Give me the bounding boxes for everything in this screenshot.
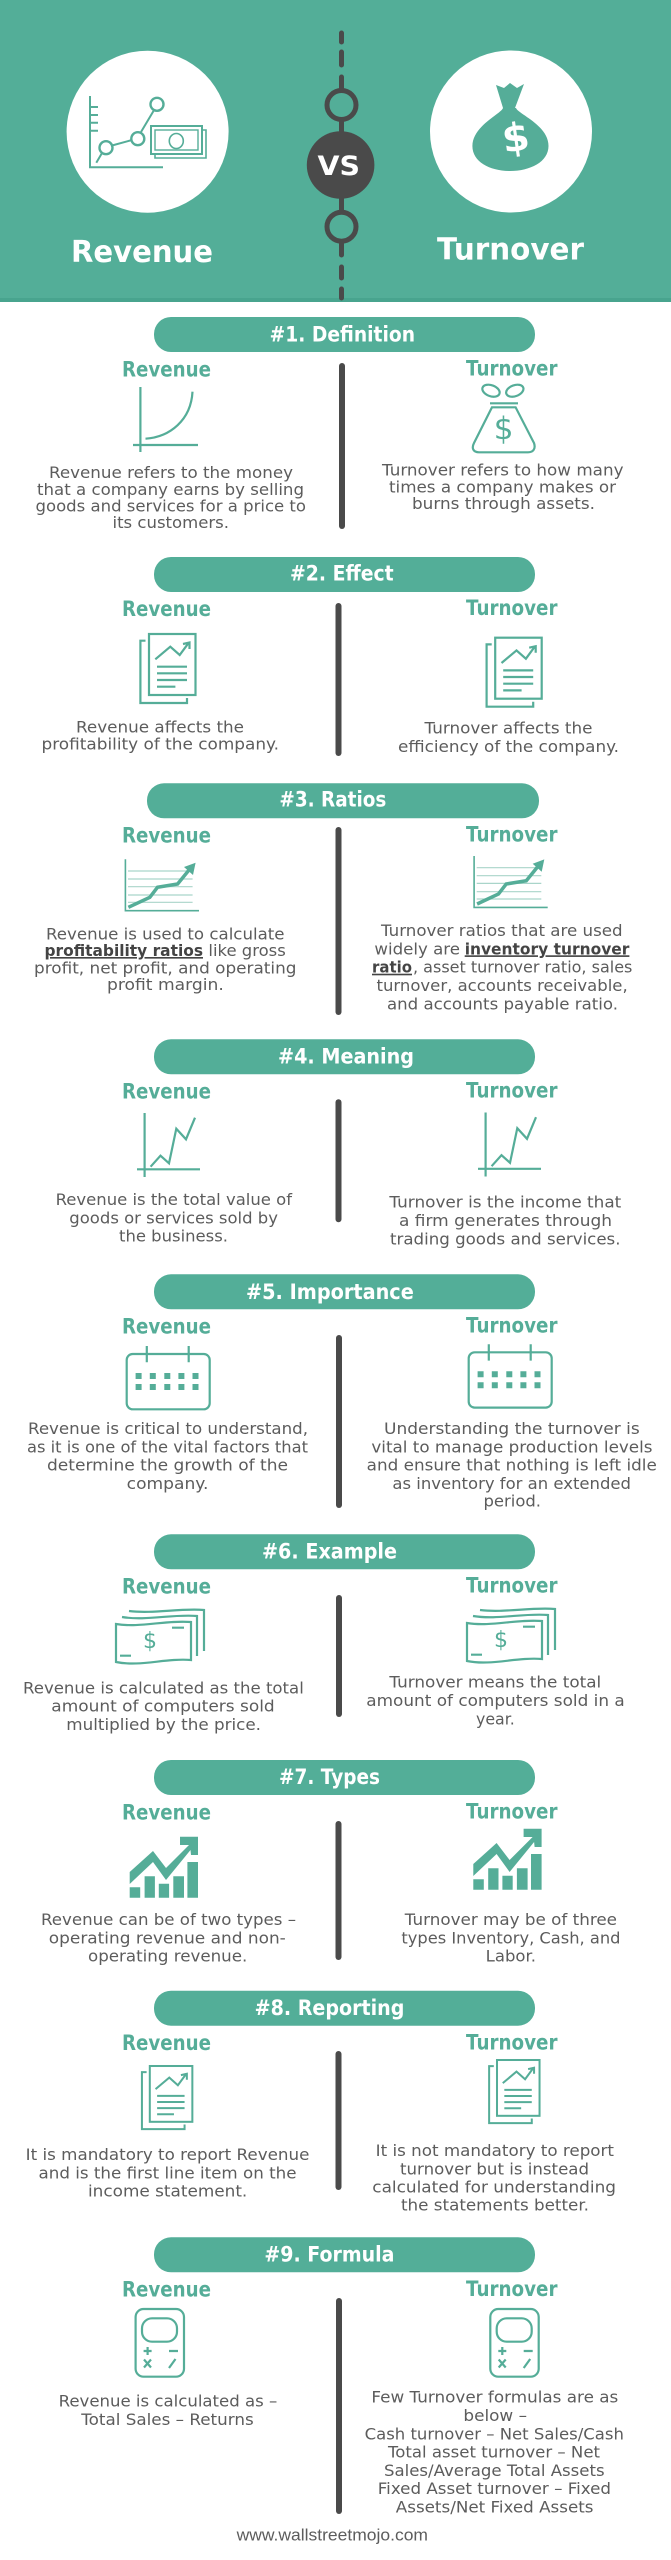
icon: report document (142, 2066, 192, 2129)
label: Revenue: Revenue (122, 597, 211, 621)
text: turnover formulas: below – (463, 2406, 527, 2425)
label: Revenue: Revenue (122, 2031, 211, 2055)
label: Turnover: Turnover (466, 2277, 558, 2301)
versus connector (307, 33, 374, 298)
text: turnover meaning: a firm generates through (399, 1211, 612, 1230)
text: revenue definition: that a company earns by selling (37, 480, 304, 499)
text: turnover example (366, 1673, 625, 1728)
text: turnover importance (367, 1419, 657, 1511)
text: turnover ratios: , asset turnover ratio, sales (413, 958, 632, 977)
text: turnover example: amount of computers sold in a (366, 1691, 625, 1710)
pill heading: Reporting: #8. Reporting (255, 1996, 404, 2020)
text: revenue meaning: Revenue is the total value of (56, 1190, 293, 1209)
label: Revenue: Revenue (122, 358, 211, 382)
icon: money bag outline: $ (494, 411, 513, 447)
text: revenue definition (36, 463, 306, 532)
section 6: Example (23, 1534, 625, 1734)
text: turnover formulas: Assets/Net Fixed Assets (396, 2497, 594, 2516)
section 8: Reporting (26, 1991, 616, 2215)
icon: report document (140, 634, 196, 703)
footer: website: www.wallstreetmojo.com (236, 2526, 428, 2545)
pill heading: Definition (154, 317, 535, 352)
icon: report document (489, 2060, 540, 2123)
text: turnover types: Labor. (486, 1947, 536, 1966)
text: turnover definition (381, 461, 624, 513)
text: revenue definition: its customers. (112, 513, 229, 532)
icon: banknotes (467, 1609, 555, 1663)
label: Revenue: Revenue (122, 1574, 211, 1598)
label: Revenue: Revenue (122, 1079, 211, 1103)
text: turnover ratios (372, 921, 632, 1013)
label: Turnover: Turnover (466, 596, 558, 620)
icon: calendar (127, 1346, 210, 1409)
pill heading: Effect (154, 557, 535, 592)
text: turnover meaning: trading goods and services. (390, 1229, 620, 1248)
text: revenue ratios (34, 924, 296, 994)
label: Turnover: Turnover (466, 2030, 558, 2054)
icon: money bag (430, 50, 592, 212)
text: revenue types: operating revenue. (88, 1947, 247, 1966)
icon: zigzag line chart (137, 1113, 200, 1177)
text: turnover types: Turnover may be of three (404, 1910, 617, 1929)
divider (336, 1821, 342, 1960)
divider (336, 2051, 342, 2190)
pill heading: Types: #7. Types (279, 1765, 380, 1789)
pill heading: Meaning (154, 1039, 535, 1074)
label: Turnover: Turnover (466, 1314, 558, 1338)
text: revenue definition: Revenue refers to the money (49, 463, 293, 482)
text: turnover ratios: and accounts payable ratio. (387, 994, 618, 1013)
divider (336, 1099, 342, 1222)
text: revenue formula (59, 2392, 277, 2429)
text: revenue example: amount of computers sold (51, 1697, 275, 1716)
text: revenue reporting: It is mandatory to report Revenue (26, 2145, 309, 2164)
text: revenue meaning: goods or services sold by (69, 1208, 278, 1227)
section 9: Formula (59, 2237, 624, 2516)
divider (336, 2298, 342, 2514)
text: turnover reporting: calculated for understanding (372, 2177, 616, 2196)
text: turnover importance: as inventory for an extended (392, 1474, 631, 1493)
versus connector: VS (318, 151, 360, 182)
section 1: Definition (36, 317, 624, 532)
pill heading: Importance (154, 1274, 535, 1309)
text: revenue ratios: profit, net profit, and operating (34, 958, 296, 977)
divider (336, 603, 342, 756)
text: revenue definition: goods and services for a price to (36, 497, 306, 516)
icon: zigzag line chart (478, 1112, 541, 1176)
heading: Revenue: Revenue (71, 235, 213, 270)
icon: report document (487, 638, 542, 707)
text: revenue ratios: profit margin. (107, 975, 224, 994)
pill heading: Example (154, 1534, 535, 1569)
icon: bar chart with arrow (473, 1829, 542, 1890)
text: revenue meaning (56, 1190, 293, 1246)
text: turnover ratios: Turnover ratios that are used (380, 921, 623, 940)
text: revenue importance (27, 1419, 308, 1493)
text: turnover importance: vital to manage production levels (371, 1437, 652, 1456)
text: turnover types: types Inventory, Cash, and (401, 1928, 620, 1947)
pill heading: Effect: #2. Effect (290, 562, 394, 586)
section 4: Meaning (56, 1039, 621, 1248)
label: Turnover: Turnover (466, 1574, 558, 1598)
section 5: Importance (27, 1274, 657, 1511)
text: revenue types: operating revenue and non- (49, 1928, 286, 1947)
text: turnover formulas: Few Turnover formulas are as (371, 2388, 618, 2407)
pill heading: Example: #6. Example (262, 1539, 397, 1563)
text: turnover formulas: Fixed Asset turnover – Fixed (378, 2479, 611, 2498)
label: Turnover: Turnover (466, 823, 558, 847)
label: Turnover: Turnover (466, 1799, 558, 1823)
icon: banknotes: $ (143, 1629, 157, 1654)
text: revenue reporting: and is the first line item on the (38, 2163, 296, 2182)
icon: rising line chart (125, 859, 199, 911)
pill heading: Ratios (147, 783, 539, 818)
pill heading: Definition: #1. Definition (270, 323, 415, 347)
text: revenue formula: Revenue is calculated as – (59, 2392, 277, 2411)
heading: Turnover: Turnover (437, 232, 584, 268)
text: revenue importance: determine the growth of the (47, 1456, 288, 1475)
text: turnover formulas: Sales/Average Total Assets (384, 2461, 605, 2480)
pill heading: Formula (154, 2237, 535, 2272)
section 2: Effect (42, 557, 619, 756)
text: revenue effect: profitability of the company. (42, 734, 279, 753)
text: revenue example: multiplied by the price. (66, 1715, 261, 1734)
label: Revenue: Revenue (122, 2278, 211, 2302)
text: revenue reporting: income statement. (88, 2182, 247, 2201)
text: revenue reporting (26, 2145, 309, 2201)
header banner (0, 0, 671, 302)
text: turnover formulas: Total asset turnover – Net (387, 2443, 600, 2462)
section 3: Ratios (34, 783, 632, 1015)
text: turnover effect: efficiency of the company. (398, 737, 619, 756)
label: Revenue: Revenue (122, 1314, 211, 1338)
pill heading: Importance: #5. Importance (246, 1280, 414, 1304)
text: turnover example: Turnover means the total (388, 1673, 601, 1692)
text: turnover ratios: turnover, accounts receivable, (376, 976, 628, 995)
section 7: Types (41, 1760, 620, 1966)
text: turnover ratios: widely are (374, 939, 460, 958)
text: turnover formulas: Cash turnover – Net Sales/Cash (365, 2424, 624, 2443)
text: turnover effect: Turnover affects the (423, 719, 592, 738)
icon: calculator (490, 2309, 539, 2377)
icon: rising line chart (474, 856, 548, 907)
icon: banknotes: $ (494, 1628, 508, 1653)
text: turnover reporting: the statements better. (401, 2196, 589, 2215)
label: Turnover: Turnover (466, 357, 558, 381)
text: turnover ratios: inventory turnover (465, 939, 629, 958)
text: turnover definition: Turnover refers to how many (381, 461, 624, 480)
text: revenue example (23, 1678, 304, 1734)
pill heading: Types (154, 1760, 535, 1795)
text: revenue types: Revenue can be of two types – (41, 1910, 296, 1929)
text: turnover reporting: turnover but is instead (400, 2159, 589, 2178)
divider (339, 363, 345, 529)
text: turnover definition: times a company makes or (389, 477, 616, 496)
text: revenue importance: company. (127, 1474, 208, 1493)
text: revenue effect (42, 717, 279, 753)
text: turnover formulas (365, 2388, 624, 2516)
text: turnover importance: Understanding the turnover is (384, 1419, 640, 1438)
icon: calculator (136, 2309, 184, 2377)
text: revenue ratios: profitability ratios (44, 941, 203, 960)
text: revenue importance: as it is one of the vital factors that (27, 1437, 308, 1456)
icon: revenue chart with banknote (67, 51, 229, 213)
divider (336, 827, 342, 1015)
icon: banknotes (116, 1610, 204, 1664)
text: turnover meaning: Turnover is the income that (388, 1193, 621, 1212)
text: turnover effect (398, 719, 619, 756)
text: turnover types (401, 1910, 620, 1966)
text: turnover importance: period. (484, 1492, 541, 1511)
icon: bar chart with arrow (130, 1837, 198, 1898)
icon: money bag: $ (499, 114, 532, 163)
text: revenue formula: Total Sales – Returns (80, 2410, 254, 2429)
pill heading: Ratios: #3. Ratios (279, 788, 386, 812)
text: turnover ratios: ratio (372, 958, 412, 977)
divider (336, 1335, 342, 1508)
icon: money bag outline (473, 382, 535, 452)
text: turnover meaning (388, 1193, 621, 1248)
text: revenue effect: Revenue affects the (76, 717, 244, 736)
icon: growth curve (133, 387, 198, 452)
text: turnover reporting (372, 2141, 616, 2215)
text: turnover example: year. (476, 1709, 515, 1728)
label: Revenue: Revenue (122, 1800, 211, 1824)
text: turnover importance: and ensure that nothing is left idle (367, 1456, 657, 1475)
label: Revenue: Revenue (122, 823, 211, 847)
icon: calendar (469, 1344, 552, 1408)
text: revenue example: Revenue is calculated as the total (23, 1678, 304, 1697)
text: revenue ratios: Revenue is used to calculate (46, 924, 284, 943)
label: Turnover: Turnover (466, 1079, 558, 1103)
pill heading: Reporting (154, 1991, 535, 2026)
text: revenue importance: Revenue is critical to understand, (28, 1419, 308, 1438)
pill heading: Meaning: #4. Meaning (278, 1044, 414, 1068)
text: revenue ratios: like gross (208, 941, 286, 960)
text: revenue types (41, 1910, 296, 1966)
divider (336, 1595, 342, 1717)
text: turnover definition: burns through assets. (412, 494, 595, 513)
text: revenue meaning: the business. (119, 1227, 228, 1246)
text: turnover reporting: It is not mandatory to report (376, 2141, 614, 2160)
pill heading: Formula: #9. Formula (264, 2243, 394, 2267)
